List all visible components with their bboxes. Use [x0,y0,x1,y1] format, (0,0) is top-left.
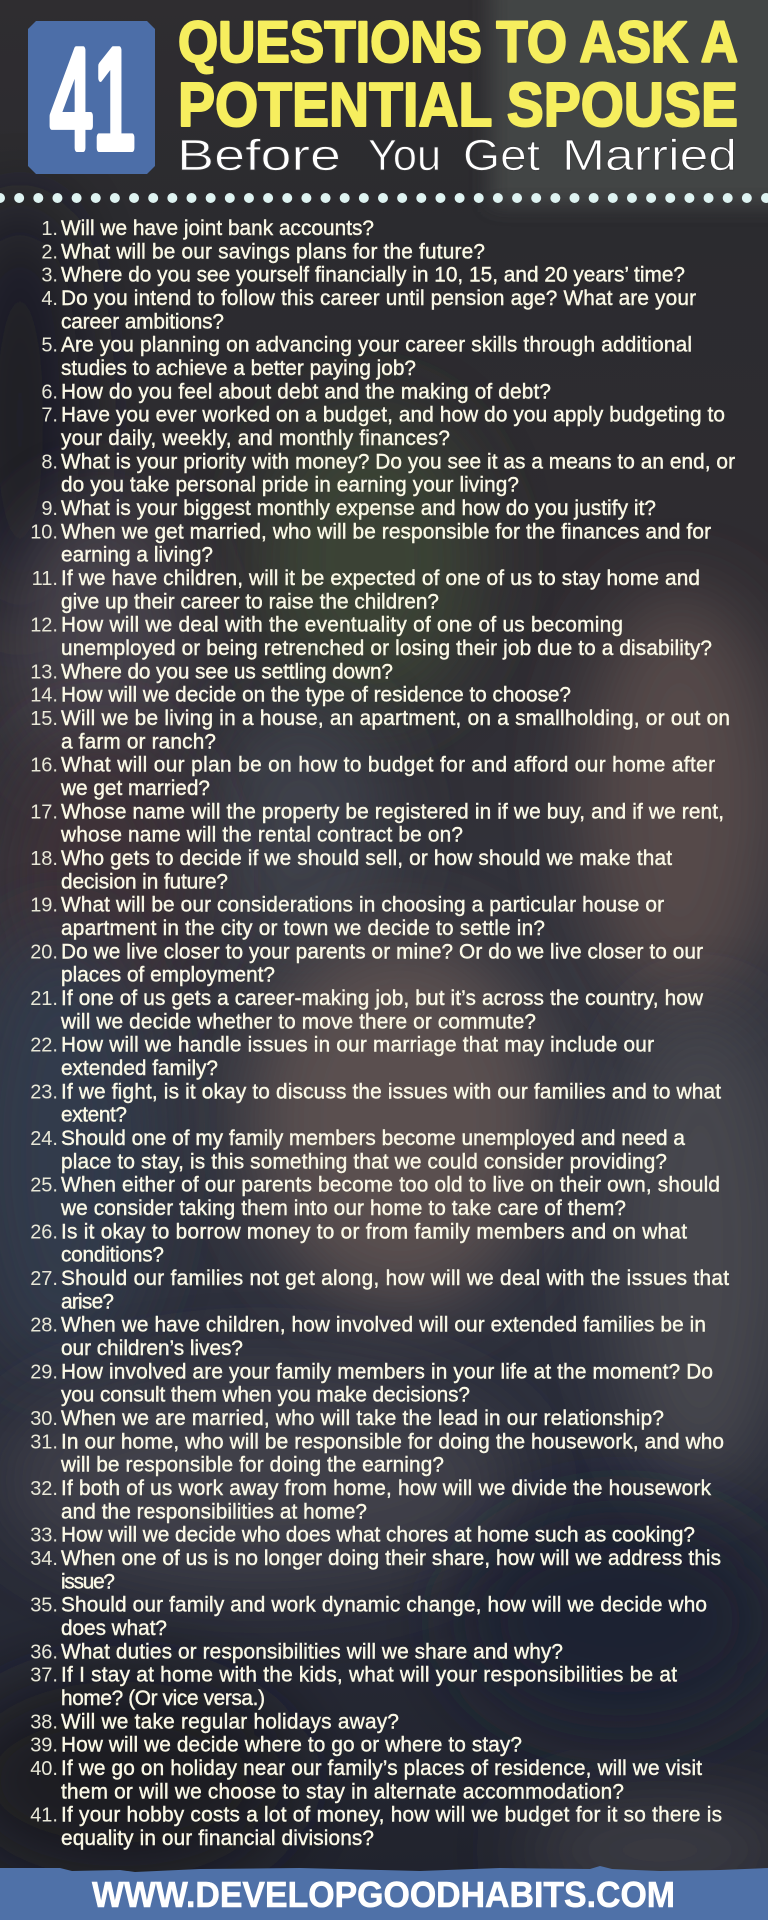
question 23: extent? [61,1104,127,1127]
question 39: 39. [30,1735,58,1757]
question 4: 4. [41,288,58,310]
question 11 [32,567,700,613]
question 25: we consider taking them into our home to take care of them? [60,1197,626,1220]
question 12: unemployed or being retrenched or losing their job due to a disability? [61,637,712,660]
question 14: 14. [30,685,58,707]
question 28: 28. [30,1315,58,1337]
question 26: conditions? [61,1244,164,1267]
question 27: Should our families not get along, how will we deal with the issues that [61,1267,729,1290]
question 4 [41,287,696,333]
question 23: 23. [30,1081,58,1103]
question 17 [30,800,724,847]
question 27: arise? [61,1290,114,1313]
question 17: whose name will the rental contract be on? [60,824,463,847]
question 40 [30,1757,702,1803]
question 15: Will we be living in a house, an apartment, on a smallholding, or out on [61,707,730,730]
question 31: In our home, who will be responsible for doing the housework, and who [61,1430,724,1453]
question 14: How will we decide on the type of residence to choose? [61,684,571,707]
question list [30,217,735,1850]
question 32: If both of us work away from home, how will we divide the housework [61,1477,712,1500]
question 36: 36. [30,1641,58,1663]
question 22: extended family? [61,1057,218,1080]
question 29: How involved are your family members in your life at the moment? Do [61,1360,713,1383]
question 20: places of employment? [61,964,275,987]
question 5: 5. [41,335,58,357]
subtitle: Before [177,131,341,180]
question 37: If I stay at home with the kids, what will your responsibilities be at [61,1664,677,1687]
question 38: Will we take regular holidays away? [61,1710,399,1733]
question 7: Have you ever worked on a budget, and how do you apply budgeting to [61,404,725,427]
question 25: 25. [30,1175,58,1197]
footer url: WWW.DEVELOPGOODHABITS.COM [92,1874,675,1915]
subtitle: Get [463,131,540,180]
question 11: If we have children, will it be expected of one of us to stay home and [61,567,700,590]
question 33: 33. [30,1525,58,1547]
question 28: our children’s lives? [61,1337,243,1360]
question 6: How do you feel about debt and the making of debt? [61,380,551,403]
question 40: them or will we choose to stay in alternate accommodation? [61,1780,624,1803]
question 20: 20. [30,941,58,963]
question 25 [30,1174,720,1220]
question 21: If one of us gets a career-making job, but it’s across the country, how [61,987,704,1010]
question 15: a farm or ranch? [61,730,216,753]
question 21: 21. [30,988,58,1010]
question 37: home? (Or vice versa.) [61,1687,265,1710]
question 37 [30,1664,677,1710]
question 13: Where do you see us settling down? [61,660,393,683]
question 10: When we get married, who will be responsible for the finances and for [61,520,711,543]
dotted divider [0,193,768,203]
question 18: Who gets to decide if we should sell, or how should we make that [61,847,672,870]
subtitle [177,131,737,180]
question 21 [30,987,704,1033]
question 8: do you take personal pride in earning your living? [61,474,519,497]
question 33: How will we decide who does what chores at home such as cooking? [61,1524,695,1547]
question 4: Do you intend to follow this career until pension age? What are your [61,287,696,310]
question 18: 18. [30,848,58,870]
question 27: 27. [30,1268,58,1290]
question 1: 1. [41,218,58,240]
question 20 [30,940,703,987]
question 15 [30,707,730,753]
question 24: 24. [30,1128,58,1150]
question 1: Will we have joint bank accounts? [61,217,374,240]
question 24 [30,1127,685,1173]
question 15: 15. [30,708,58,730]
question 19: 19. [30,895,58,917]
question 30: 30. [30,1408,58,1430]
question 19: What will be our considerations in choosing a particular house or [61,894,664,917]
question 19 [30,894,664,940]
question 31: 31. [30,1431,58,1453]
question 2: What will be our savings plans for the future? [61,240,485,263]
question 22: 22. [30,1035,58,1057]
question 3: Where do you see yourself financially in 10, 15, and 20 years’ time? [61,264,685,287]
question 7: 7. [41,405,58,427]
question 23 [30,1080,721,1127]
question 8 [41,450,735,497]
question 35: does what? [61,1617,167,1640]
question 11: 11. [32,568,58,590]
footer band [0,1866,768,1920]
question 2: 2. [41,241,58,263]
question 26: 26. [30,1221,58,1243]
question 23: If we fight, is it okay to discuss the issues with our families and to what [61,1080,721,1103]
question 34: When one of us is no longer doing their share, how will we address this [61,1547,721,1570]
question 36: What duties or responsibilities will we share and why? [61,1640,563,1663]
question 7: your daily, weekly, and monthly finances? [61,427,450,450]
question 21: will we decide whether to move there or commute? [60,1010,536,1033]
question 41: If your hobby costs a lot of money, how will we budget for it so there is [61,1804,722,1827]
title [178,10,738,140]
question 27 [30,1267,729,1313]
subtitle: You [368,131,441,180]
question 13: 13. [30,661,58,683]
badge: 41 [28,20,155,179]
question 32 [30,1477,712,1523]
question 41 [30,1804,722,1850]
question 18 [30,847,672,893]
question 7 [41,404,725,450]
question 32: and the responsibilities at home? [61,1500,367,1523]
question 26: Is it okay to borrow money to or from family members and on what [61,1220,687,1243]
question 9: 9. [41,498,58,520]
question 34: issue? [61,1570,115,1593]
question 22 [30,1034,654,1080]
question 32: 32. [30,1478,58,1500]
question 10: earning a living? [61,544,213,567]
question 28 [30,1314,706,1360]
question 6: 6. [41,381,58,403]
question 35: 35. [30,1595,58,1617]
question 29: 29. [30,1361,58,1383]
question 40: If we go on holiday near our family’s places of residence, will we visit [61,1757,702,1780]
question 24: place to stay, is this something that we could consider providing? [61,1150,667,1173]
question 29: you consult them when you make decisions? [61,1384,470,1407]
question 4: career ambitions? [61,310,224,333]
question 9: What is your biggest monthly expense and how do you justify it? [61,497,656,520]
question 3: 3. [41,265,58,287]
question 8: What is your priority with money? Do you see it as a means to an end, or [61,450,735,473]
badge: 41: 41 [50,20,136,179]
question 34: 34. [30,1548,58,1570]
question 5: studies to achieve a better paying job? [61,357,416,380]
question 16: What will our plan be on how to budget for and afford our home after [61,754,715,777]
question 8: 8. [41,451,58,473]
question 18: decision in future? [61,870,228,893]
question 30: When we are married, who will take the lead in our relationship? [61,1407,664,1430]
question 38: 38. [30,1711,58,1733]
question 16 [30,754,715,800]
question 41: 41. [30,1805,58,1827]
question 16: 16. [30,755,58,777]
question 5 [41,334,692,380]
question 40: 40. [30,1758,58,1780]
question 22: How will we handle issues in our marriage that may include our [61,1034,654,1057]
question 10 [30,520,711,567]
question 19: apartment in the city or town we decide to settle in? [61,917,545,940]
question 5: Are you planning on advancing your career skills through additional [61,334,692,357]
question 25: When either of our parents become too old to live on their own, should [61,1174,720,1197]
question 20: Do we live closer to your parents or mine? Or do we live closer to our [61,940,703,963]
question 34 [30,1547,721,1593]
question 31 [30,1430,724,1477]
question 31: will be responsible for doing the earning? [60,1454,444,1477]
question 11: give up their career to raise the children? [61,590,439,613]
question 16: we get married? [60,777,210,800]
question 10: 10. [30,521,58,543]
question 37: 37. [30,1665,58,1687]
question 12: How will we deal with the eventuality of one of us becoming [61,614,623,637]
question 35 [30,1594,707,1640]
question 17: 17. [30,801,58,823]
question 12: 12. [30,615,58,637]
question 35: Should our family and work dynamic change, how will we decide who [61,1594,707,1617]
question 17: Whose name will the property be registered in if we buy, and if we rent, [61,800,724,823]
question 24: Should one of my family members become unemployed and need a [61,1127,685,1150]
question 28: When we have children, how involved will our extended families be in [61,1314,706,1337]
question 39: How will we decide where to go or where to stay? [61,1734,522,1757]
question 26 [30,1220,687,1267]
question 29 [30,1360,713,1407]
question 41: equality in our financial divisions? [61,1827,374,1850]
subtitle: Married [562,131,737,180]
question 12 [30,614,712,660]
